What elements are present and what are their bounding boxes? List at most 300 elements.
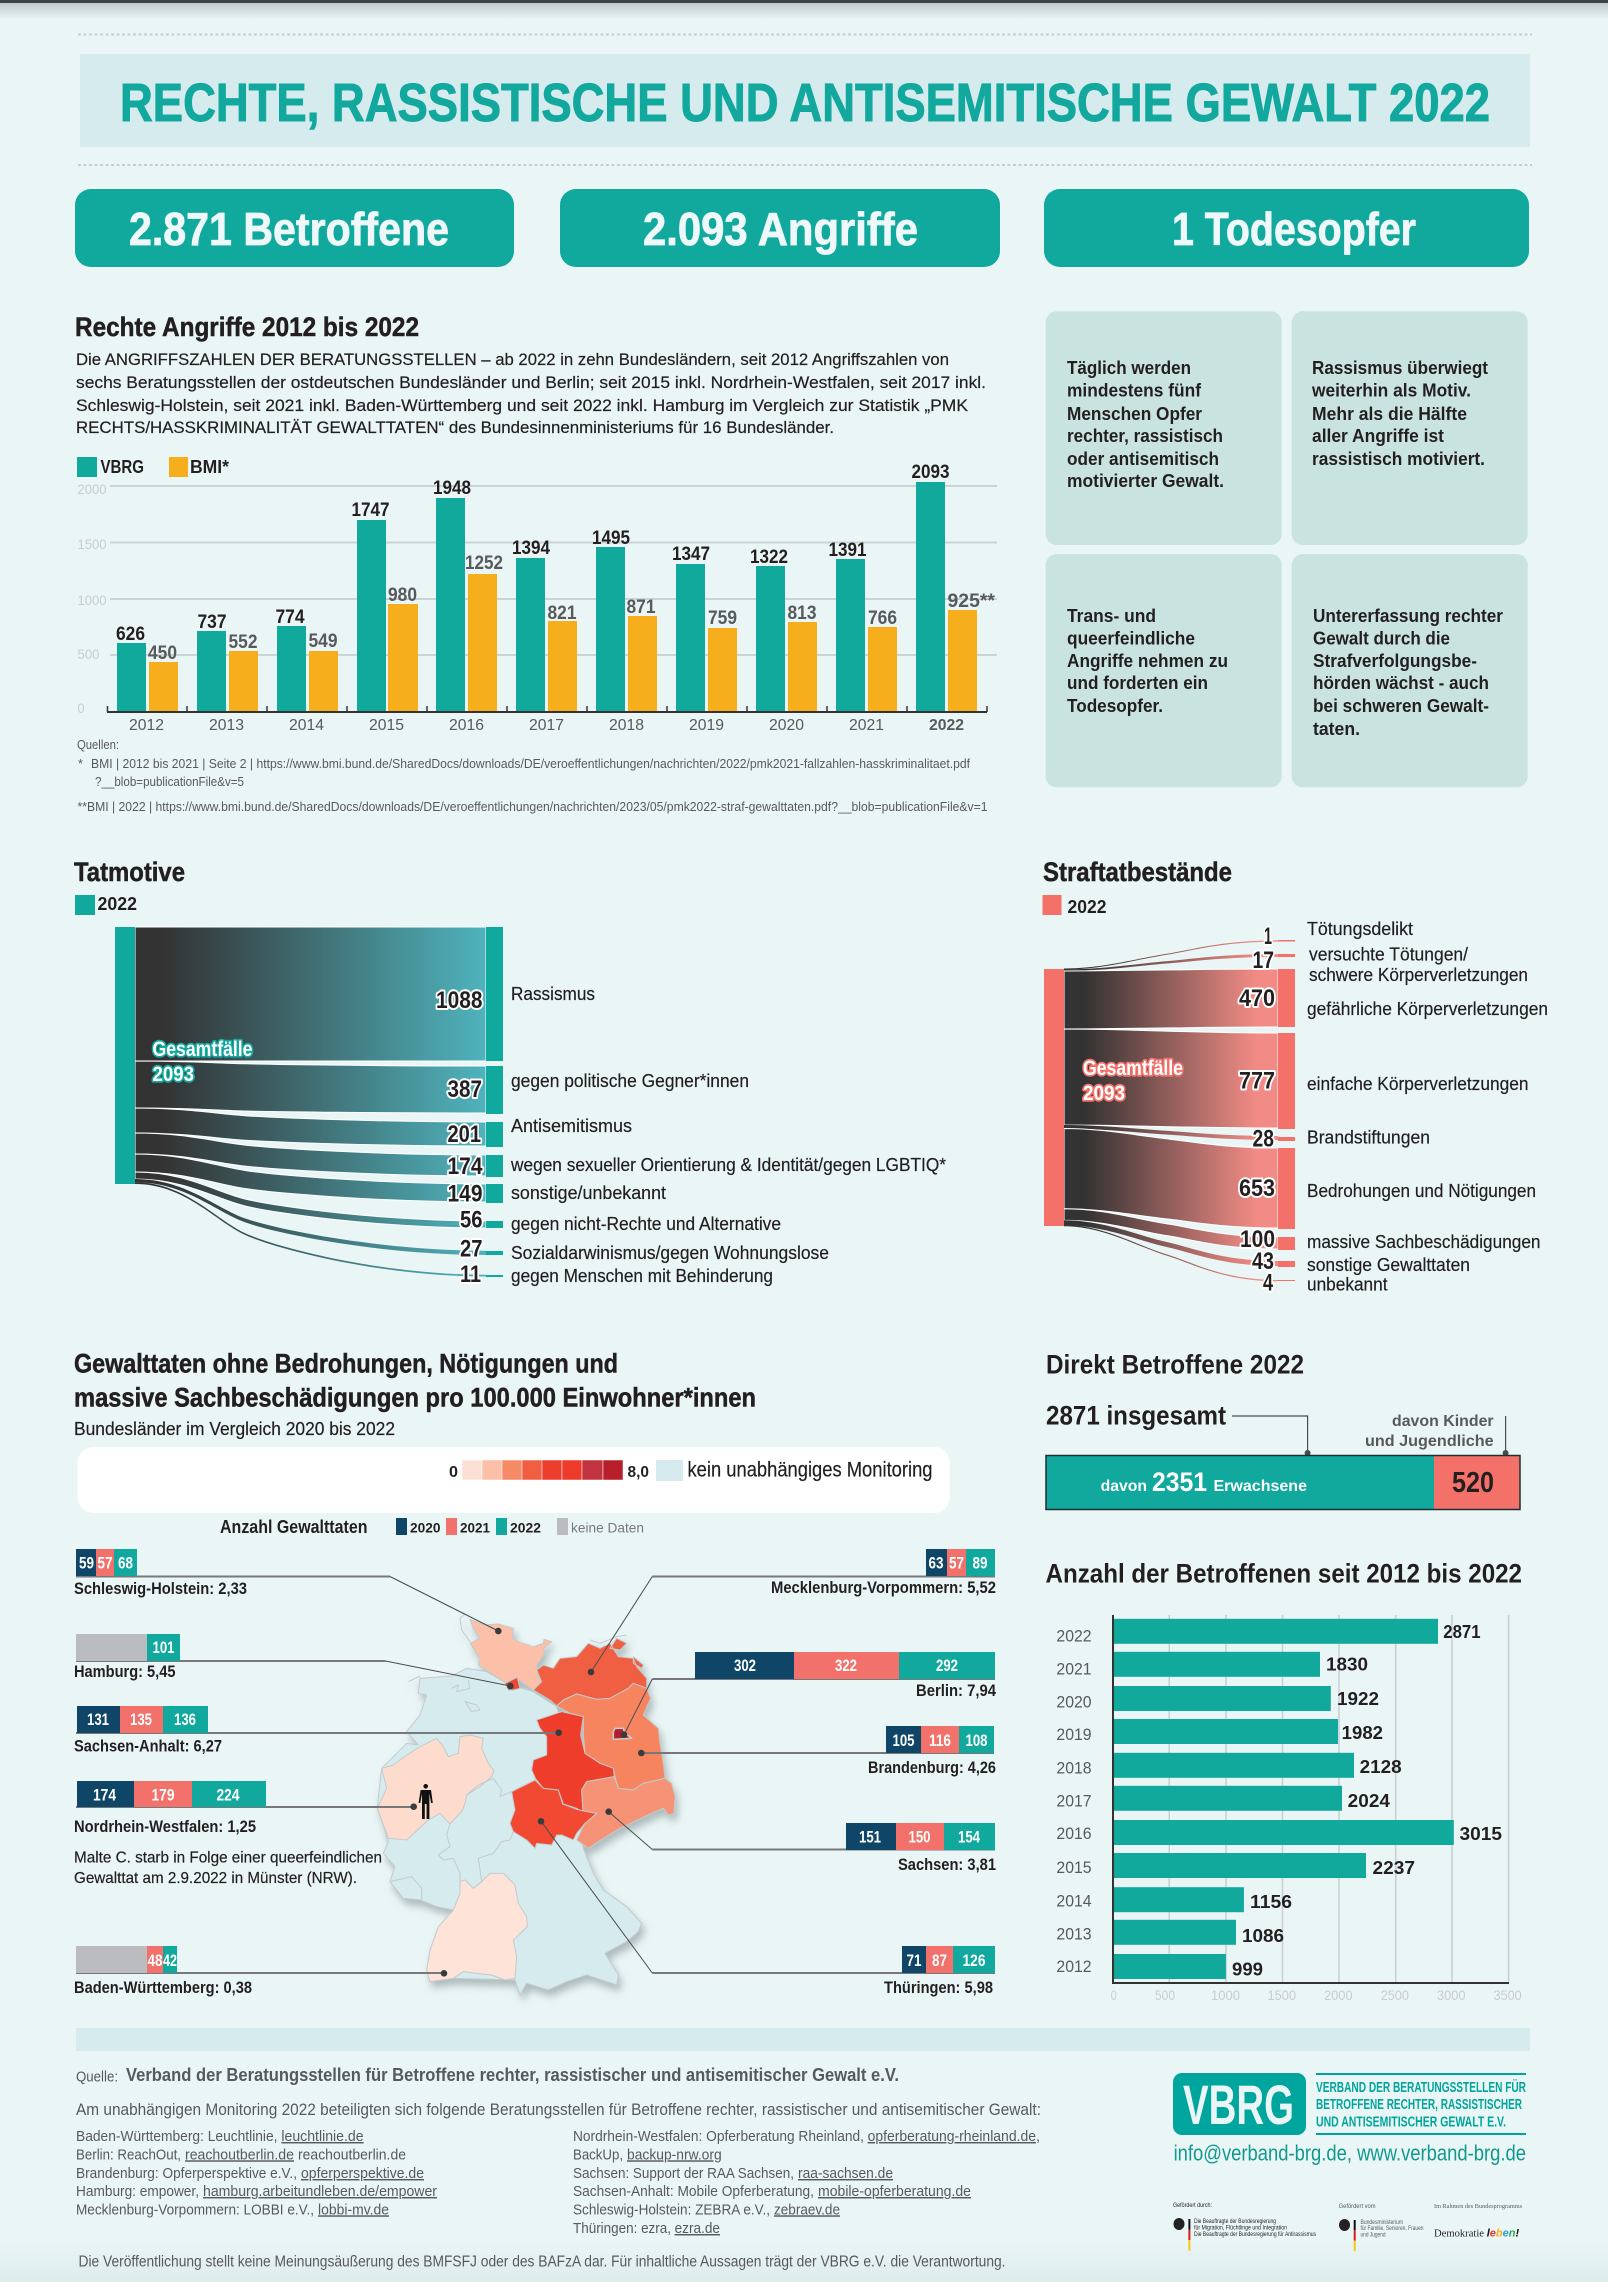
horizontal bar chart: Betroffene je Jahr: 1830 bbox=[1326, 1654, 1368, 1674]
bar chart: VBRG vs BMI: 1322 bbox=[750, 547, 788, 568]
bars: Baden-Württemberg bbox=[74, 1946, 252, 1997]
sankey chart: Straftatbestände: 2093 bbox=[1083, 1082, 1125, 1105]
legend: Anzahl Gewalttaten bbox=[220, 1517, 644, 1537]
bar chart: VBRG vs BMI: 2093 bbox=[912, 462, 950, 483]
footer: Beratungsstellen left column: Berlin: ReachOut, bbox=[76, 2147, 181, 2163]
bars: Thüringen: 126 bbox=[962, 1951, 986, 1970]
legend bbox=[77, 457, 229, 477]
state: Brandenburg bbox=[557, 1683, 665, 1790]
horizontal bar chart: Betroffene je Jahr: 2237 bbox=[1372, 1858, 1415, 1878]
funder: Demokratie leben: leben! bbox=[1487, 2228, 1519, 2240]
bars: Mecklenburg-Vorpommern bbox=[771, 1549, 996, 1597]
note: Malte C.: Gewalttat am 2.9.2022 in Münster (NRW). bbox=[74, 1870, 357, 1887]
bar chart: VBRG vs BMI: 1747 bbox=[352, 500, 390, 521]
bar chart: VBRG vs BMI: 925** bbox=[948, 591, 996, 612]
footer: Beratungsstellen left column: leuchtlinie.de bbox=[281, 2129, 364, 2145]
bar chart: VBRG vs BMI: 2000 bbox=[78, 481, 107, 497]
sankey chart: Tatmotive: 56 bbox=[460, 1207, 482, 1234]
panel: Rassismus überwiegt: Mehr als die Hälfte bbox=[1312, 404, 1467, 424]
sankey chart: Tatmotive: Antisemitismus bbox=[511, 1116, 632, 1136]
chart sources: BMI | 2012 bis 2021 | Seite 2 | https://www.bmi.bund.de/SharedDocs/downloads/DE/veroeffentlichungen/nachrichten/2022/pmk2021-fallzahlen-hasskriminalitaet.pdf bbox=[91, 757, 971, 771]
map legend: kein unabhängiges Monitoring bbox=[688, 1459, 932, 1482]
footer: Beratungsstellen right column: BackUp, bbox=[573, 2147, 623, 2163]
panel: Rassismus überwiegt: weiterhin als Motiv. bbox=[1311, 381, 1471, 401]
bar chart: VBRG vs BMI: 626 bbox=[116, 624, 145, 645]
sankey chart: Tatmotive: 387 bbox=[448, 1076, 482, 1103]
sankey chart: Straftatbestände: Bedrohungen und Nötigungen bbox=[1307, 1181, 1536, 1201]
stacked bar: Direkt Betroffene: und Jugendliche bbox=[1365, 1433, 1494, 1450]
footer: Beratungsstellen left column: lobbi-mv.de bbox=[318, 2202, 389, 2218]
panel: queerfeindliche Angriffe bbox=[1046, 554, 1282, 787]
bars: Brandenburg: 116 bbox=[929, 1731, 951, 1750]
sankey chart: Straftatbestände: massive Sachbeschädigungen bbox=[1307, 1232, 1540, 1252]
key figure: Betroffene bbox=[75, 189, 514, 267]
footer: Beratungsstellen right column: opferberatung-rheinland.de bbox=[868, 2129, 1036, 2145]
bars: Sachsen: Sachsen: 3,81 bbox=[898, 1855, 996, 1874]
footer: Beratungsstellen right column bbox=[573, 2129, 1040, 2237]
bars: Schleswig-Holstein: 59 bbox=[79, 1554, 94, 1573]
intro text: Schleswig-Holstein, seit 2021 inkl. Baden-Württemberg und seit 2022 inkl. Hamburg im Vergleich zur Statistik „PMK bbox=[76, 396, 969, 415]
footer: Beratungsstellen right column: Nordrhein-Westfalen: Opferberatung Rheinland, bbox=[573, 2129, 864, 2145]
panel: Untererfassung: hörden wächst - auch bbox=[1313, 673, 1489, 693]
funder: Demokratie leben: Demokratie bbox=[1434, 2229, 1485, 2240]
sankey chart: Tatmotive: gegen nicht-Rechte und Alternative bbox=[511, 1214, 781, 1234]
footer: Beratungsstellen right column: raa-sachsen.de bbox=[798, 2166, 893, 2182]
horizontal bar chart: Betroffene je Jahr: 2500 bbox=[1381, 1987, 1409, 2003]
panel: queerfeindliche Angriffe: queerfeindliche bbox=[1067, 628, 1195, 648]
bars: Sachsen-Anhalt: 131 bbox=[87, 1710, 109, 1729]
footer: Beratungsstellen right column: ezra.de bbox=[675, 2221, 720, 2237]
horizontal bar chart: Betroffene je Jahr: 2022 bbox=[1056, 1626, 1092, 1645]
horizontal bar chart: Betroffene je Jahr: 2024 bbox=[1348, 1791, 1390, 1811]
horizontal bar chart: Betroffene je Jahr: 2000 bbox=[1324, 1987, 1353, 2003]
sankey chart: Straftatbestände: schwere Körperverletzungen bbox=[1309, 965, 1528, 985]
bars: Sachsen: 150 bbox=[908, 1828, 930, 1847]
bar chart: VBRG vs BMI: 1252 bbox=[465, 553, 503, 574]
bar chart: VBRG vs BMI: 2014 bbox=[289, 717, 324, 734]
bar chart: VBRG vs BMI: 766 bbox=[868, 608, 897, 629]
horizontal bar chart: Betroffene je Jahr: 500 bbox=[1155, 1987, 1175, 2003]
bars: Brandenburg: 105 bbox=[892, 1731, 914, 1750]
state: Hamburg bbox=[505, 1677, 520, 1690]
footer: Beratungsstellen right column: zebraev.de bbox=[774, 2202, 840, 2218]
sankey chart: Straftatbestände: 470 bbox=[1239, 985, 1275, 1012]
horizontal bar chart: Betroffene je Jahr: 2012 bbox=[1056, 1957, 1092, 1976]
bars: Schleswig-Holstein: 57 bbox=[98, 1554, 112, 1573]
bars: Schleswig-Holstein: 68 bbox=[118, 1554, 133, 1573]
horizontal bar chart: Betroffene je Jahr: 2014 bbox=[1056, 1891, 1092, 1910]
sankey chart: Straftatbestände: Tötungsdelikt bbox=[1307, 919, 1413, 939]
heading: Tatmotive: Tatmotive bbox=[74, 857, 185, 887]
horizontal bar chart: Betroffene je Jahr: 2016 bbox=[1056, 1824, 1092, 1843]
footer: Quelle: Verband der Beratungsstellen für Betroffene rechter, rassistischer und antisemitischer Gewalt e.V. bbox=[126, 2065, 899, 2085]
bar chart: VBRG vs BMI: 774 bbox=[276, 607, 305, 628]
state: Mecklenburg-Vorpommern bbox=[533, 1638, 647, 1706]
sankey chart: Straftatbestände: sonstige Gewalttaten bbox=[1307, 1255, 1470, 1275]
bars: Sachsen-Anhalt: Sachsen-Anhalt: 6,27 bbox=[74, 1737, 222, 1756]
bar chart: VBRG vs BMI: 2016 bbox=[449, 717, 484, 734]
sankey chart: Tatmotive: sonstige/unbekannt bbox=[511, 1183, 666, 1203]
sankey chart: Tatmotive: Gesamtfälle bbox=[152, 1038, 252, 1061]
state: Baden-Württemberg bbox=[427, 1873, 527, 1982]
funder: BMFSFJ: und Jugend bbox=[1360, 2232, 1386, 2239]
bars: Sachsen-Anhalt bbox=[74, 1706, 222, 1756]
funder: Beauftragte der Bundesregierung: Die Beauftragte der Bundesregierung für Antirassismus bbox=[1194, 2231, 1317, 2238]
heading: Direkt Betroffene: Direkt Betroffene 2022 bbox=[1046, 1349, 1304, 1379]
panel: fünf Menschen täglich: Täglich werden bbox=[1067, 358, 1191, 378]
sankey chart: Tatmotive: Sozialdarwinismus/gegen Wohnungslose bbox=[511, 1243, 829, 1263]
sankey chart: Straftatbestände bbox=[1044, 919, 1548, 1297]
stacked bar: Direkt Betroffene: davon Kinder bbox=[1392, 1413, 1494, 1430]
sankey chart: Tatmotive: gegen politische Gegner*innen bbox=[511, 1071, 749, 1091]
bars: Brandenburg: 108 bbox=[966, 1731, 988, 1750]
sankey chart: Straftatbestände: Gesamtfälle bbox=[1083, 1057, 1183, 1080]
panel: Untererfassung: Gewalt durch die bbox=[1313, 628, 1450, 648]
bars: Berlin: 322 bbox=[835, 1656, 857, 1675]
logo: VBRG bbox=[1173, 2073, 1526, 2136]
horizontal bar chart: Betroffene je Jahr: 2018 bbox=[1056, 1759, 1092, 1778]
horizontal bar chart: Betroffene je Jahr: 3500 bbox=[1494, 1987, 1522, 2003]
horizontal bar chart: Betroffene je Jahr: 1922 bbox=[1337, 1689, 1379, 1709]
legend: Anzahl Gewalttaten: 2022 bbox=[510, 1520, 541, 1536]
sankey chart: Straftatbestände: versuchte Tötungen/ bbox=[1309, 945, 1468, 965]
panel: fünf Menschen täglich: Menschen Opfer bbox=[1067, 404, 1202, 424]
bar chart: VBRG vs BMI: 1394 bbox=[512, 538, 550, 559]
bar chart: VBRG vs BMI: 2012 bbox=[129, 717, 164, 734]
footer: Beratungsstellen left column: Brandenburg: Opferperspektive e.V., bbox=[76, 2166, 297, 2182]
chart sources bbox=[77, 738, 988, 814]
panel: queerfeindliche Angriffe: Todesopfer. bbox=[1067, 696, 1163, 716]
bars: Nordrhein-Westfalen: Nordrhein-Westfalen: 1,25 bbox=[74, 1817, 256, 1836]
key figure: Betroffene: 2.871 Betroffene bbox=[129, 203, 449, 255]
panel: fünf Menschen täglich: motivierter Gewalt. bbox=[1067, 471, 1224, 491]
state: Thüringen bbox=[510, 1780, 597, 1848]
bars: Sachsen bbox=[846, 1823, 996, 1874]
stacked bar: Direkt Betroffene: Erwachsene bbox=[1214, 1478, 1307, 1495]
sankey chart: Tatmotive: 2093 bbox=[152, 1063, 194, 1086]
map of Germany bbox=[377, 1613, 675, 1995]
footer: disclaimer: Die Veröffentlichung stellt keine Meinungsäußerung des BMFSFJ oder des BAFzA dar. Für inhaltliche Aussagen trägt der VBRG e.V. die Verantwortung. bbox=[78, 2254, 1006, 2271]
horizontal bar chart: Betroffene je Jahr bbox=[1056, 1615, 1522, 2003]
horizontal bar chart: Betroffene je Jahr: 2128 bbox=[1360, 1757, 1402, 1777]
horizontal bar chart: Betroffene je Jahr: 2015 bbox=[1056, 1858, 1092, 1877]
footer: Beratungsstellen right column: Thüringen: ezra, bbox=[573, 2221, 671, 2237]
panel: Rassismus überwiegt: Rassismus überwiegt bbox=[1312, 358, 1488, 378]
bars: Berlin: 292 bbox=[936, 1656, 958, 1675]
bar chart: VBRG vs BMI: 2017 bbox=[529, 717, 564, 734]
funder: Beauftragte der Bundesregierung: für Migration, Flüchtlinge und Integration bbox=[1194, 2225, 1287, 2232]
legend: BMI* bbox=[190, 457, 229, 477]
state: Berlin bbox=[613, 1728, 632, 1739]
bars: Baden-Württemberg: 42 bbox=[163, 1951, 177, 1970]
sankey chart: Tatmotive: 149 bbox=[448, 1181, 482, 1208]
horizontal bar chart: Betroffene je Jahr: 2021 bbox=[1056, 1659, 1092, 1678]
sankey chart: Tatmotive: 201 bbox=[448, 1121, 481, 1148]
key figure: Todesopfer bbox=[1044, 189, 1529, 267]
title bbox=[80, 54, 1530, 147]
sankey chart: Straftatbestände: 28 bbox=[1252, 1126, 1274, 1153]
bars: Nordrhein-Westfalen bbox=[74, 1781, 266, 1836]
note: Malte C. bbox=[74, 1850, 382, 1887]
bar chart: VBRG vs BMI: 821 bbox=[548, 603, 577, 624]
chart sources: Quellen: bbox=[77, 738, 119, 752]
panel: queerfeindliche Angriffe: und forderten ein bbox=[1067, 673, 1208, 693]
bar chart: VBRG vs BMI: 450 bbox=[148, 643, 177, 664]
panel: queerfeindliche Angriffe: Angriffe nehmen zu bbox=[1067, 651, 1228, 671]
bars: Thüringen: 87 bbox=[932, 1951, 947, 1970]
bar chart: VBRG vs BMI: 1500 bbox=[78, 536, 107, 552]
bar chart: VBRG vs BMI: 813 bbox=[788, 603, 816, 624]
bars: Sachsen: 154 bbox=[958, 1828, 980, 1847]
bars: Mecklenburg-Vorpommern: Mecklenburg-Vorpommern: 5,52 bbox=[771, 1578, 996, 1597]
heading: Rechte Angriffe: Rechte Angriffe 2012 bis 2022 bbox=[75, 312, 419, 342]
bars: Mecklenburg-Vorpommern: 89 bbox=[972, 1554, 988, 1573]
funder: Beauftragte der Bundesregierung bbox=[1173, 2202, 1317, 2251]
contact line: info@verband-brg.de, www.verband-brg.de bbox=[1174, 2141, 1526, 2166]
key figure: Angriffe: 2.093 Angriffe bbox=[643, 203, 918, 255]
intro text: sechs Beratungsstellen der ostdeutschen Bundesländer und Berlin; seit 2015 inkl. Nordrhein-Westfalen, seit 2017 inkl. bbox=[76, 373, 986, 392]
horizontal bar chart: Betroffene je Jahr: 0 bbox=[1111, 1987, 1117, 2003]
footer: Beratungsstellen left column: hamburg.arbeitundleben.de/empower bbox=[203, 2184, 437, 2200]
horizontal bar chart: Betroffene je Jahr: 3000 bbox=[1437, 1987, 1466, 2003]
bar chart: VBRG vs BMI: 1948 bbox=[433, 478, 471, 499]
sankey chart: Tatmotive: gegen Menschen mit Behinderung bbox=[511, 1266, 773, 1286]
bar chart: VBRG vs BMI: 1391 bbox=[828, 540, 867, 561]
funder: BMFSFJ: Gefördert vom bbox=[1339, 2203, 1376, 2210]
bar chart: VBRG vs BMI: 1000 bbox=[78, 592, 107, 608]
sankey chart: Straftatbestände: unbekannt bbox=[1307, 1275, 1388, 1295]
map legend: 8,0 bbox=[628, 1464, 649, 1481]
sankey chart: Straftatbestände: 1 bbox=[1264, 923, 1272, 950]
bars: Mecklenburg-Vorpommern: 57 bbox=[949, 1554, 964, 1573]
bars: Nordrhein-Westfalen: 174 bbox=[93, 1786, 116, 1805]
funder: BMFSFJ: Bundesministerium bbox=[1360, 2219, 1403, 2226]
panel: fünf Menschen täglich: rechter, rassistisch bbox=[1067, 426, 1223, 446]
horizontal bar chart: Betroffene je Jahr: 2871 bbox=[1443, 1622, 1480, 1642]
bars: Baden-Württemberg: 48 bbox=[148, 1951, 162, 1970]
footer: Beratungsstellen right column: mobile-opferberatung.de bbox=[818, 2184, 971, 2200]
bars: Hamburg: 101 bbox=[152, 1638, 174, 1657]
horizontal bar chart: Betroffene je Jahr: 2019 bbox=[1056, 1725, 1092, 1744]
footer: Beratungsstellen right column: , bbox=[1036, 2129, 1040, 2145]
bar chart: VBRG vs BMI: 980 bbox=[388, 585, 417, 606]
horizontal bar chart: Betroffene je Jahr: 999 bbox=[1232, 1960, 1263, 1980]
footer: Beratungsstellen left column: opferperspektive.de bbox=[301, 2166, 424, 2182]
footer: Beratungsstellen left column: Hamburg: empower, bbox=[76, 2184, 199, 2200]
sankey chart: Straftatbestände: 653 bbox=[1239, 1175, 1275, 1202]
sankey chart: Tatmotive: 11 bbox=[460, 1261, 481, 1288]
bars: Schleswig-Holstein: Schleswig-Holstein: 2,33 bbox=[74, 1579, 247, 1598]
sankey chart: Straftatbestände: 4 bbox=[1263, 1270, 1273, 1297]
panel: Untererfassung: Strafverfolgungsbe- bbox=[1313, 651, 1477, 671]
legend: Tatmotive 2022: 2022 bbox=[98, 894, 137, 914]
bar chart: VBRG vs BMI: 1495 bbox=[592, 528, 630, 549]
bars: Brandenburg bbox=[868, 1726, 996, 1777]
legend: Anzahl Gewalttaten: keine Daten bbox=[571, 1520, 644, 1536]
panel: Untererfassung: taten. bbox=[1313, 719, 1360, 739]
panel: fünf Menschen täglich: mindestens fünf bbox=[1067, 381, 1202, 401]
legend: Straftatbestände 2022: 2022 bbox=[1068, 897, 1106, 917]
panel: Rassismus überwiegt: aller Angriffe ist bbox=[1312, 426, 1444, 446]
horizontal bar chart: Betroffene je Jahr: 1982 bbox=[1342, 1723, 1383, 1743]
sankey chart: Tatmotive: 27 bbox=[460, 1236, 482, 1263]
map legend: 0 bbox=[449, 1464, 458, 1481]
heading: Gewalttaten pro 100.000 bbox=[74, 1349, 756, 1413]
intro text: RECHTS/HASSKRIMINALITÄT GEWALTTATEN“ des Bundesinnenministeriums für 16 Bundesländer. bbox=[76, 418, 834, 437]
stacked bar: Direkt Betroffene: davon bbox=[1101, 1478, 1147, 1495]
stacked bar: Direkt Betroffene bbox=[1046, 1400, 1520, 1510]
footer: Beratungsstellen left column: Baden-Württemberg: Leuchtlinie, bbox=[76, 2129, 278, 2145]
subheading: Bundesländer im Vergleich 2020 bis 2022 bbox=[74, 1419, 395, 1439]
bars: Sachsen-Anhalt: 136 bbox=[174, 1710, 196, 1729]
bars: Berlin: 302 bbox=[734, 1656, 756, 1675]
panel: Rassismus überwiegt bbox=[1292, 311, 1528, 545]
intro text: Die ANGRIFFSZAHLEN DER BERATUNGSSTELLEN – ab 2022 in zehn Bundesländern, seit 2012 Angriffszahlen von bbox=[76, 350, 949, 369]
sankey chart: Straftatbestände: 43 bbox=[1252, 1248, 1274, 1275]
bar chart: VBRG vs BMI: 2022 bbox=[929, 717, 964, 734]
bar chart: VBRG vs BMI: 871 bbox=[626, 597, 656, 618]
footer: Beratungsstellen right column: Schleswig-Holstein: ZEBRA e.V., bbox=[573, 2202, 770, 2218]
footer: Beratungsstellen right column: Sachsen: Support der RAA Sachsen, bbox=[573, 2166, 794, 2182]
state: Sachsen-Anhalt bbox=[532, 1712, 614, 1813]
sankey chart: Tatmotive bbox=[115, 927, 946, 1288]
bars: Sachsen-Anhalt: 135 bbox=[130, 1710, 152, 1729]
footer: Monitoring intro: Am unabhängigen Monitoring 2022 beteiligten sich folgende Beratungsstellen für Betroffene rechter, rassistischer und antisemitischer Gewalt: bbox=[76, 2101, 1041, 2119]
horizontal bar chart: Betroffene je Jahr: 1500 bbox=[1268, 1987, 1296, 2003]
footer: Beratungsstellen right column: backup-nrw.org bbox=[627, 2147, 722, 2163]
bars: Schleswig-Holstein bbox=[74, 1549, 247, 1598]
sankey chart: Straftatbestände: gefährliche Körperverletzungen bbox=[1307, 999, 1548, 1019]
state: Nordrhein-Westfalen bbox=[377, 1735, 494, 1840]
bar chart: VBRG vs BMI: 2021 bbox=[849, 717, 884, 734]
bars: Berlin: Berlin: 7,94 bbox=[916, 1681, 996, 1700]
horizontal bar chart: Betroffene je Jahr: 2020 bbox=[1056, 1692, 1092, 1711]
horizontal bar chart: Betroffene je Jahr: 1000 bbox=[1211, 1987, 1240, 2003]
panel: fünf Menschen täglich: oder antisemitisch bbox=[1067, 449, 1219, 469]
heading: Straftatbestände: Straftatbestände bbox=[1043, 857, 1232, 887]
legend: Anzahl Gewalttaten: 2020 bbox=[410, 1520, 441, 1536]
panel: Untererfassung bbox=[1292, 554, 1528, 787]
chart sources: * bbox=[78, 757, 83, 771]
footer: Beratungsstellen left column: reachoutberlin.de bbox=[185, 2147, 294, 2163]
bar chart: VBRG vs BMI: 0 bbox=[78, 700, 85, 716]
bar chart: VBRG vs BMI: 2013 bbox=[209, 717, 244, 734]
stacked bar: Direkt Betroffene: 2871 insgesamt bbox=[1046, 1400, 1226, 1430]
icon: person (Todesopfer) bbox=[419, 1784, 433, 1819]
funder: Beauftragte der Bundesregierung: Die Beauftragte der Bundesregierung bbox=[1194, 2218, 1276, 2225]
leader lines and state bars bbox=[74, 1549, 996, 1997]
funder: Demokratie leben: Im Rahmen des Bundesprogramms bbox=[1434, 2203, 1522, 2210]
chart sources: **BMI | 2022 | https://www.bmi.bund.de/SharedDocs/downloads/DE/veroeffentlichungen/nachrichten/2023/05/pmk2022-straf-gewalttaten.pdf?__blob=publicationFile&v=1 bbox=[78, 800, 988, 814]
state: Sachsen bbox=[577, 1777, 675, 1848]
heading: Gewalttaten pro 100.000: massive Sachbeschädigungen pro 100.000 Einwohner*innen bbox=[74, 1383, 756, 1413]
bar chart: VBRG vs BMI: 737 bbox=[198, 612, 226, 633]
horizontal bar chart: Betroffene je Jahr: 1156 bbox=[1250, 1892, 1292, 1912]
panel: queerfeindliche Angriffe: Trans- und bbox=[1067, 606, 1156, 626]
bar chart: VBRG vs BMI: 2020 bbox=[769, 717, 804, 734]
footer: Beratungsstellen right column: Sachsen-Anhalt: Mobile Opferberatung, bbox=[573, 2184, 814, 2200]
bar chart: VBRG vs BMI: 2015 bbox=[369, 717, 404, 734]
key figure: Todesopfer: 1 Todesopfer bbox=[1172, 203, 1416, 255]
bars: Nordrhein-Westfalen: 179 bbox=[152, 1786, 174, 1805]
panel: Untererfassung: Untererfassung rechter bbox=[1313, 606, 1503, 626]
panel: Untererfassung: bei schweren Gewalt- bbox=[1313, 696, 1489, 716]
bar chart: VBRG vs BMI: 759 bbox=[708, 608, 737, 629]
sankey chart: Straftatbestände: 17 bbox=[1252, 947, 1274, 974]
bar chart: VBRG vs BMI: 500 bbox=[78, 646, 100, 662]
bars: Hamburg bbox=[74, 1634, 180, 1681]
sankey chart: Tatmotive: 174 bbox=[448, 1153, 483, 1180]
note: Malte C.: Malte C. starb in Folge einer queerfeindlichen bbox=[74, 1850, 382, 1867]
legend: Anzahl Gewalttaten: Anzahl Gewalttaten bbox=[220, 1517, 368, 1537]
bar chart: VBRG vs BMI: 2019 bbox=[689, 717, 724, 734]
sankey chart: Tatmotive: wegen sexueller Orientierung & Identität/gegen LGBTIQ* bbox=[510, 1155, 946, 1175]
panel: fünf Menschen täglich bbox=[1046, 311, 1282, 545]
bars: Mecklenburg-Vorpommern: 63 bbox=[928, 1554, 944, 1573]
bars: Thüringen: Thüringen: 5,98 bbox=[884, 1978, 993, 1997]
bar chart: VBRG vs BMI: 549 bbox=[308, 631, 338, 652]
bars: Baden-Württemberg: Baden-Württemberg: 0,38 bbox=[74, 1978, 252, 1997]
footer: Beratungsstellen left column bbox=[76, 2129, 437, 2218]
bar chart: VBRG vs BMI: 552 bbox=[228, 632, 258, 653]
logo: VBRG: UND ANTISEMITISCHER GEWALT E.V. bbox=[1316, 2115, 1506, 2131]
state: Schleswig-Holstein bbox=[470, 1619, 552, 1690]
horizontal bar chart: Betroffene je Jahr: 2013 bbox=[1056, 1924, 1092, 1943]
map legend bbox=[78, 1447, 950, 1513]
horizontal bar chart: Betroffene je Jahr: 2017 bbox=[1056, 1792, 1092, 1811]
bar chart: VBRG vs BMI: 1347 bbox=[672, 544, 710, 565]
intro text bbox=[76, 350, 986, 437]
bars: Nordrhein-Westfalen: 224 bbox=[216, 1786, 240, 1805]
footer: Quelle: Quelle: bbox=[76, 2069, 118, 2086]
bar chart: VBRG vs BMI: 2018 bbox=[609, 717, 644, 734]
bars: Hamburg: Hamburg: 5,45 bbox=[74, 1662, 176, 1681]
bars: Thüringen bbox=[884, 1946, 995, 1997]
horizontal bar chart: Betroffene je Jahr: 1086 bbox=[1242, 1926, 1284, 1946]
funder: Beauftragte der Bundesregierung: Gefördert durch: bbox=[1173, 2202, 1212, 2209]
logo: VBRG: VBRG bbox=[1183, 2073, 1294, 2136]
bar chart: VBRG vs BMI bbox=[77, 457, 997, 734]
sankey chart: Straftatbestände: einfache Körperverletzungen bbox=[1307, 1074, 1528, 1094]
base: states without monitoring bbox=[377, 1668, 642, 1995]
logo: VBRG: BETROFFENE RECHTER, RASSISTISCHER bbox=[1316, 2097, 1522, 2113]
funder: Demokratie leben bbox=[1434, 2203, 1522, 2240]
legend: Tatmotive 2022 bbox=[75, 894, 137, 915]
funder: BMFSFJ: für Familie, Senioren, Frauen bbox=[1360, 2225, 1424, 2232]
sankey chart: Tatmotive: Rassismus bbox=[511, 984, 595, 1004]
horizontal bar chart: Betroffene je Jahr: 3015 bbox=[1460, 1824, 1502, 1844]
legend: Anzahl Gewalttaten: 2021 bbox=[460, 1520, 490, 1536]
funder: BMFSFJ bbox=[1339, 2203, 1424, 2251]
bars: Berlin bbox=[695, 1652, 996, 1700]
sankey chart: Straftatbestände: Brandstiftungen bbox=[1307, 1128, 1430, 1148]
legend: VBRG bbox=[100, 457, 144, 477]
key figure: Angriffe bbox=[560, 189, 1000, 267]
bars: Sachsen: 151 bbox=[859, 1828, 881, 1847]
sankey chart: Straftatbestände: 777 bbox=[1239, 1068, 1275, 1095]
bars: Thüringen: 71 bbox=[906, 1951, 922, 1970]
sankey chart: Straftatbestände: 100 bbox=[1240, 1226, 1275, 1253]
legend: Straftatbestände 2022 bbox=[1042, 895, 1106, 917]
footer: Beratungsstellen left column: Mecklenburg-Vorpommern: LOBBI e.V., bbox=[76, 2202, 314, 2218]
heading: Anzahl der Betroffenen: Anzahl der Betroffenen seit 2012 bis 2022 bbox=[1046, 1558, 1522, 1588]
footer: Beratungsstellen left column: reachoutberlin.de bbox=[298, 2147, 406, 2163]
stacked bar: Direkt Betroffene: 520 bbox=[1452, 1467, 1494, 1499]
chart sources: ?__blob=publicationFile&v=5 bbox=[95, 775, 244, 789]
stacked bar: Direkt Betroffene: 2351 bbox=[1152, 1467, 1207, 1497]
panel: Rassismus überwiegt: rassistisch motiviert. bbox=[1312, 449, 1485, 469]
heading: Gewalttaten pro 100.000: Gewalttaten ohne Bedrohungen, Nötigungen und bbox=[74, 1349, 618, 1379]
